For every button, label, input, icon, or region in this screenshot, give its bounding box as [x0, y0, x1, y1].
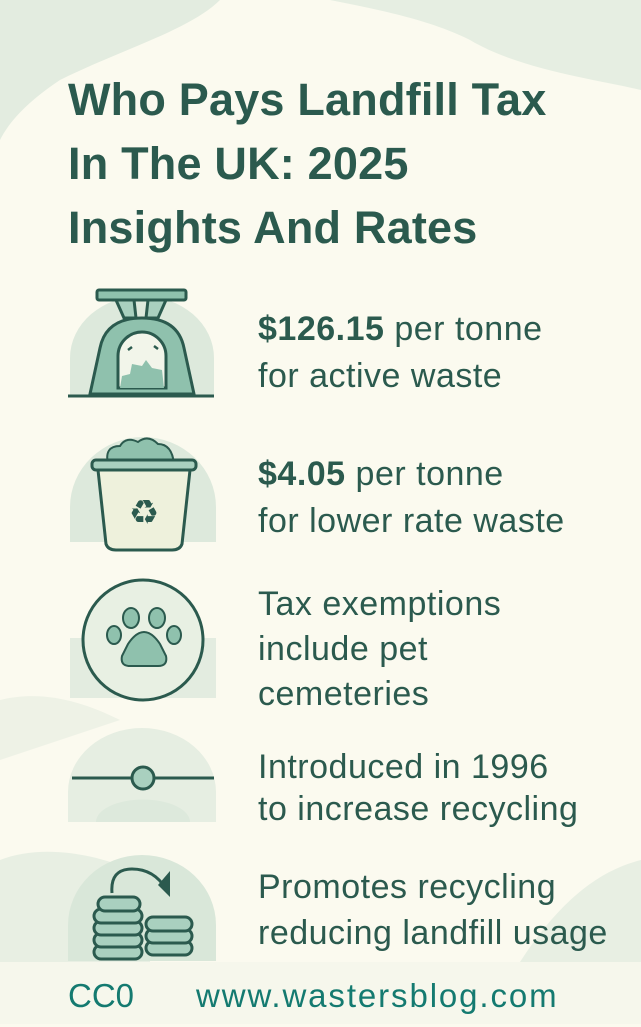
title: [68, 74, 546, 253]
text: introduced 1996: Introduced in 1996: [258, 748, 549, 786]
text: lower rate: for lower rate waste: [258, 502, 565, 540]
text: active waste rate: [258, 310, 543, 395]
text: promotes recycling: reducing landfill usage: [258, 914, 608, 952]
text: exemptions: [258, 585, 501, 713]
title: In The UK: 2025: [68, 138, 409, 189]
footer: [0, 962, 641, 1024]
icon: timeline: [68, 728, 216, 822]
text: exemptions: include pet: [258, 630, 428, 668]
text: promotes recycling: Promotes recycling: [258, 868, 556, 906]
text: active waste rate: $126.15 per tonne: [258, 310, 543, 348]
text: exemptions: cemeteries: [258, 675, 429, 713]
text: active waste rate: for active waste: [258, 357, 502, 395]
footer: license: CC0: [68, 977, 134, 1014]
icon: recycling bin: [70, 437, 216, 552]
title: Insights And Rates: [68, 202, 477, 253]
icon: recycling bin: ♻: [129, 493, 159, 533]
text: promotes recycling: [258, 868, 608, 952]
text: lower rate: [258, 455, 565, 540]
text: introduced 1996: [258, 748, 578, 828]
icon: paw circle: [70, 578, 216, 702]
icon: scale: [68, 288, 214, 398]
text: lower rate: $4.05 per tonne: [258, 455, 504, 493]
title: Who Pays Landfill Tax: [68, 74, 546, 125]
text: exemptions: Tax exemptions: [258, 585, 501, 623]
footer: url: www.wastersblog.com: [196, 977, 559, 1014]
text: introduced 1996: to increase recycling: [258, 790, 578, 828]
icon: coins with arrow: [68, 855, 216, 961]
